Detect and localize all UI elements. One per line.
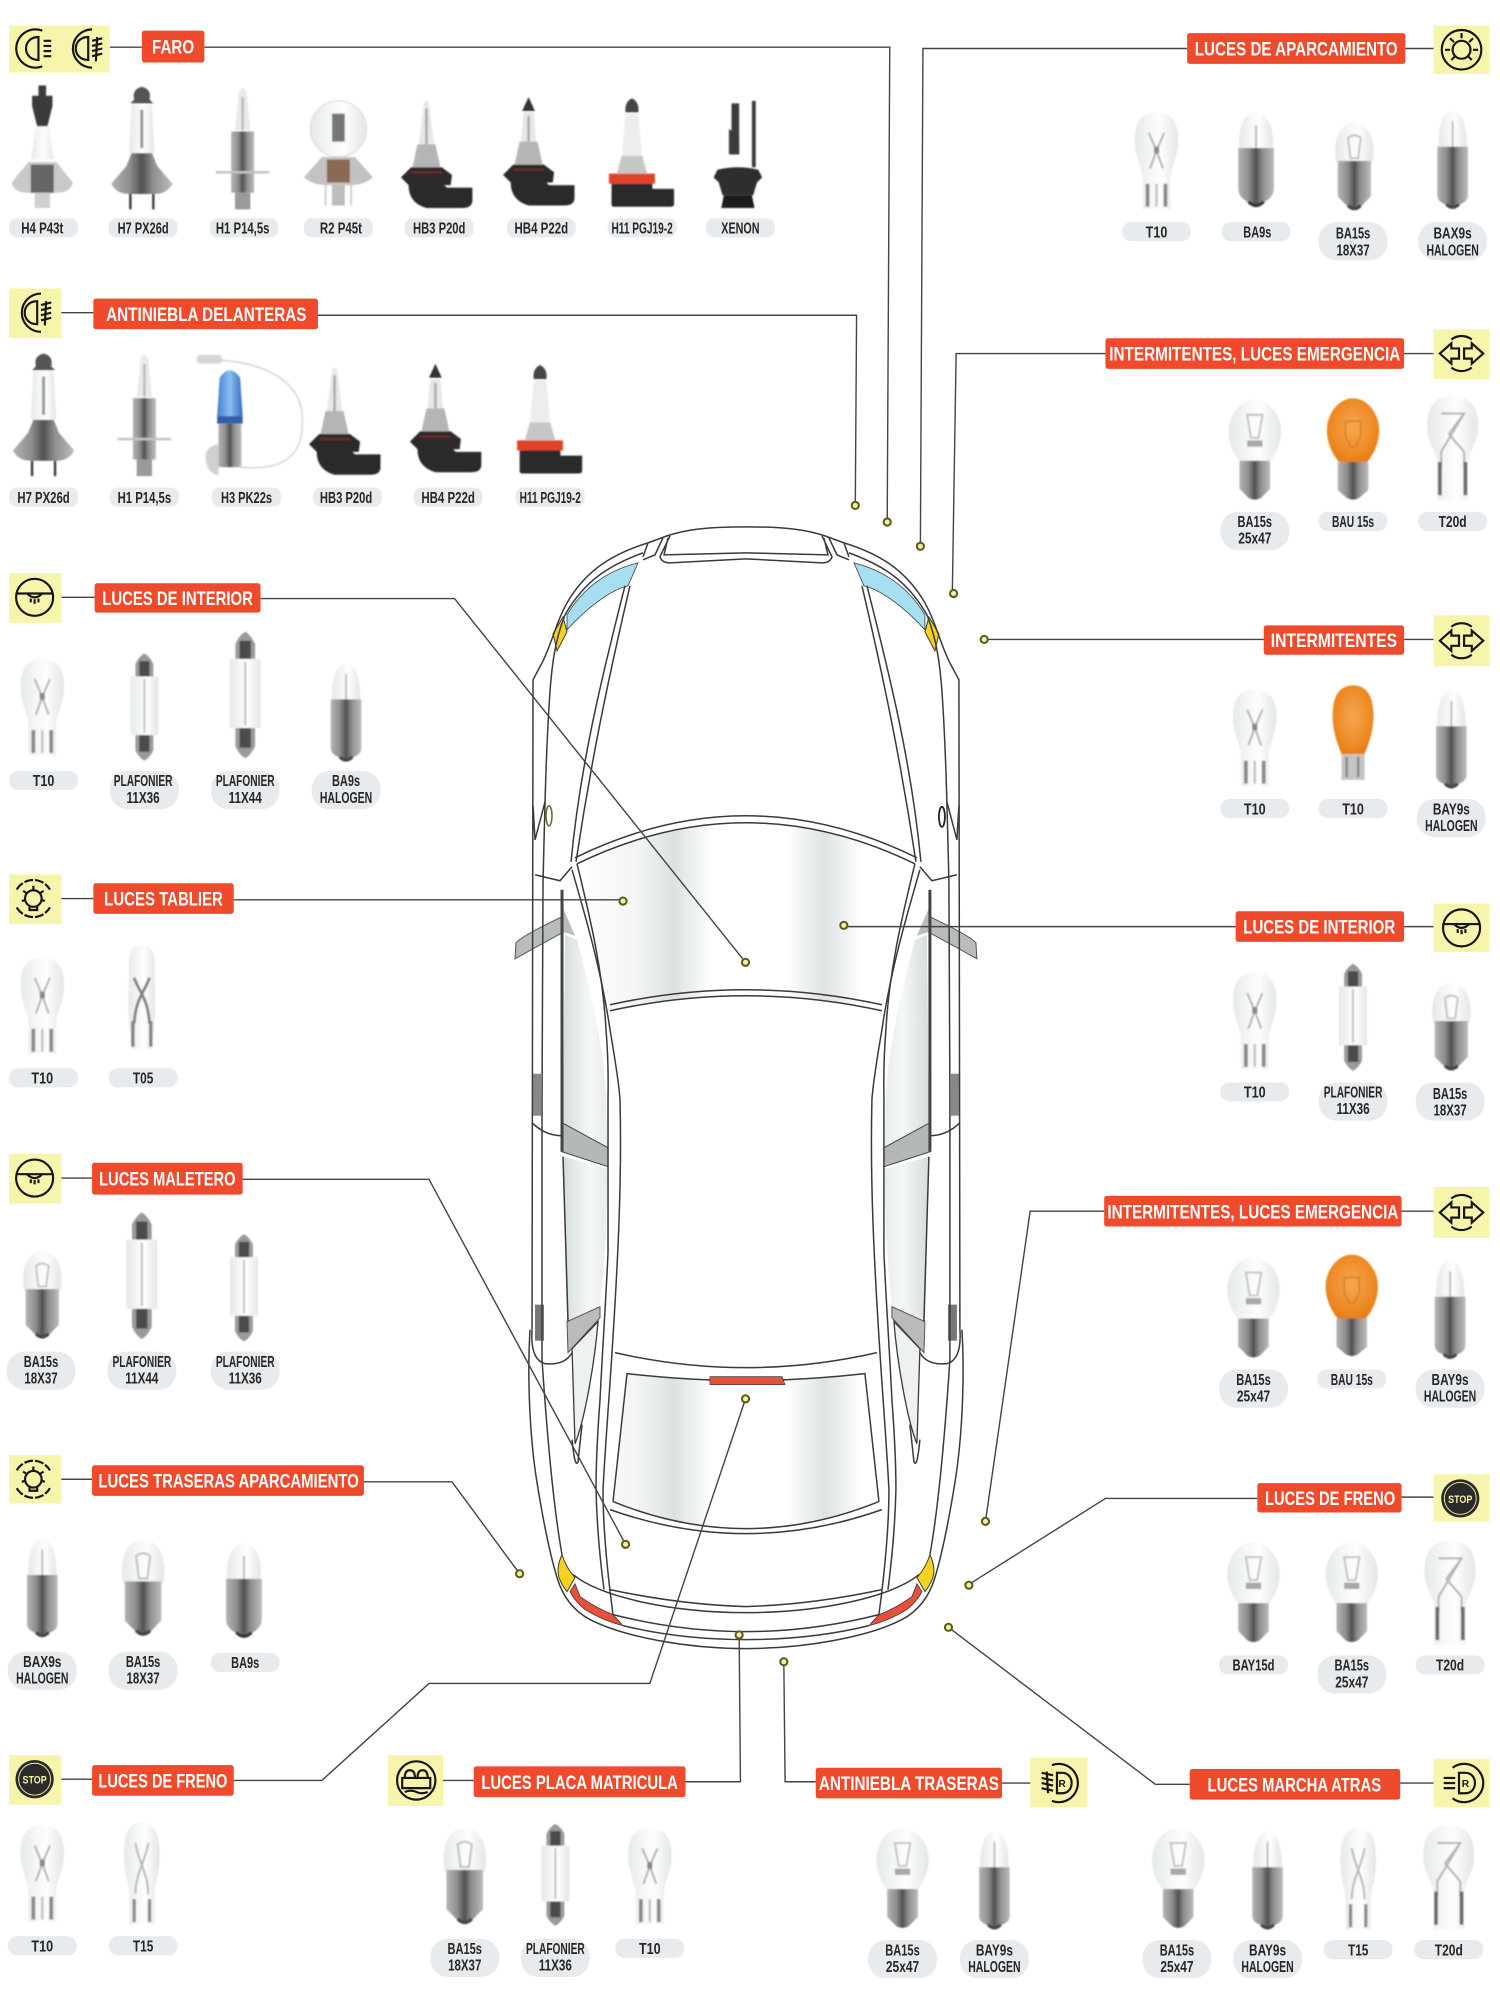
bulb: H11 PGJ19-2: H11 PGJ19-2 bbox=[520, 490, 581, 507]
bulb: BA15s 25x47 bbox=[1219, 1257, 1288, 1408]
bulb: HB4 P22d: HB4 P22d bbox=[515, 221, 568, 238]
bulb: HB3 P20d bbox=[309, 368, 382, 507]
icon: turn signal arrows bbox=[1404, 615, 1490, 666]
bulb: R2 P45t: R2 P45t bbox=[320, 221, 362, 238]
heading: luces maletero: LUCES MALETERO bbox=[99, 1169, 236, 1191]
bulb: T20d: T20d bbox=[1436, 1658, 1464, 1675]
heading: luces tablier: LUCES TABLIER bbox=[104, 889, 223, 911]
panel: intermitentes bbox=[1220, 615, 1490, 837]
icon: parking light bbox=[9, 1455, 92, 1504]
bulb: H1 P14,5s: H1 P14,5s bbox=[118, 490, 171, 507]
bulb: BAX9s halogen: BAX9s bbox=[1433, 226, 1472, 243]
heading: luces traseras aparcamiento: LUCES TRASERAS APARCAMIENTO bbox=[98, 1471, 359, 1493]
bulb: Xenon bbox=[706, 101, 775, 238]
heading: intermitentes luces emergencia: INTERMITENTES, LUCES EMERGENCIA bbox=[1107, 1201, 1398, 1223]
bulb: BA15s 18X37: BA15s bbox=[448, 1941, 482, 1958]
panel: luces traseras aparcamiento bbox=[8, 1455, 364, 1690]
bulb: BA15s 18X37 bbox=[109, 1539, 178, 1690]
bulb: BA9s halogen: HALOGEN bbox=[320, 790, 372, 807]
bulb: BA15s 18X37: BA15s bbox=[1433, 1086, 1467, 1103]
bulb: BA15s 25x47: BA15s bbox=[1160, 1942, 1194, 1959]
bulb: Plafonier 11X36: 11X36 bbox=[127, 790, 160, 807]
panel: luces de interior left bbox=[9, 573, 381, 809]
heading: faro: FARO bbox=[152, 37, 194, 59]
bulb: H1 P14,5s bbox=[110, 355, 179, 507]
panel: luces maletero bbox=[7, 1154, 280, 1390]
heading: antiniebla traseras bbox=[816, 1768, 1002, 1798]
heading: luces de interior bbox=[1236, 911, 1404, 942]
icon: turn signal arrows bbox=[1404, 329, 1490, 379]
bulb: H7 PX26d: H7 PX26d bbox=[17, 490, 70, 507]
bulb: BAX9s halogen: HALOGEN bbox=[16, 1670, 68, 1687]
panel: luces placa matricula bbox=[388, 1755, 686, 1977]
panel: luces de freno left bbox=[8, 1755, 234, 1955]
bulb: H4 P43t bbox=[9, 86, 78, 238]
rear window glass bbox=[613, 1374, 879, 1529]
bulb: HB4 P22d bbox=[410, 364, 483, 507]
bulb: BAU 15s orange bbox=[1317, 1255, 1386, 1389]
bulb: Plafonier 11X36: 11X36 bbox=[539, 1958, 572, 1975]
icon: stop: STOP bbox=[1448, 1494, 1473, 1506]
heading: luces marcha atras: LUCES MARCHA ATRAS bbox=[1208, 1774, 1381, 1796]
bulb: Plafonier 11X44: 11X44 bbox=[229, 790, 262, 807]
bulb: H3 PK22s: H3 PK22s bbox=[221, 490, 272, 507]
bulb: Plafonier 11X36 bbox=[1319, 964, 1388, 1121]
bulb: BA15s 25x47 bbox=[868, 1828, 937, 1978]
bulb: T20d bbox=[1416, 1541, 1485, 1675]
bulb: BAY15d bbox=[1219, 1542, 1288, 1675]
heading: luces de freno: LUCES DE FRENO bbox=[1265, 1488, 1395, 1510]
bulb: T20d: T20d bbox=[1435, 1942, 1463, 1959]
bulb: T10 orange: T10 bbox=[1342, 801, 1364, 818]
heading: luces tablier bbox=[93, 883, 234, 914]
bulb: Plafonier 11X36 bbox=[211, 1234, 280, 1390]
bulb: BA15s 25x47: BA15s bbox=[1335, 1658, 1369, 1675]
bulb: Plafonier 11X44: PLAFONIER bbox=[216, 773, 275, 790]
bulb: T10 bbox=[9, 957, 78, 1088]
bulb: T05 bbox=[109, 944, 178, 1088]
bulb: BAX9s halogen bbox=[8, 1539, 77, 1690]
bulb: T05: T05 bbox=[133, 1071, 153, 1088]
bulb: BAX9s halogen bbox=[1418, 111, 1487, 260]
bulb: BA15s 25x47: BA15s bbox=[885, 1942, 920, 1959]
bulb: T20d: T20d bbox=[1439, 514, 1467, 531]
bulb: T15 bbox=[109, 1823, 178, 1955]
bulb: BA15s 18X37 bbox=[7, 1251, 75, 1390]
bulb: T10: T10 bbox=[33, 773, 55, 790]
bulb: BAY15d: BAY15d bbox=[1232, 1658, 1275, 1675]
bulb: H1 P14,5s bbox=[209, 88, 278, 238]
bulb: T10: T10 bbox=[639, 1941, 661, 1958]
bulb: H11 PGJ19-2: H11 PGJ19-2 bbox=[612, 221, 673, 238]
bulb: T15: T15 bbox=[1348, 1942, 1368, 1959]
bulb: T10 bbox=[1122, 112, 1191, 241]
bulb: BA15s 18X37: 18X37 bbox=[1433, 1103, 1467, 1120]
panel: luces de interior right bbox=[1220, 904, 1490, 1121]
panel: luces tablier bbox=[9, 874, 234, 1088]
bulb: BA9s halogen: BA9s bbox=[332, 773, 360, 790]
bulb: BA15s 25x47: BA15s bbox=[1238, 514, 1272, 531]
bulb: BAY9s halogen bbox=[1417, 690, 1486, 837]
bulb: BA15s 18X37: 18X37 bbox=[1336, 242, 1370, 259]
heading: antiniebla delanteras bbox=[93, 299, 318, 329]
heading: luces de aparcamiento: LUCES DE APARCAMIENTO bbox=[1195, 39, 1398, 61]
bulb: BA15s 18X37: BA15s bbox=[24, 1354, 58, 1371]
bulb: H3 PK22s bbox=[197, 355, 302, 507]
bulb: BA15s 25x47 bbox=[1317, 1542, 1386, 1694]
bulb: H4 P43t: H4 P43t bbox=[21, 221, 64, 238]
heading: luces de freno: LUCES DE FRENO bbox=[98, 1770, 227, 1792]
bulb: H1 P14,5s: H1 P14,5s bbox=[216, 221, 270, 238]
panel: faro bbox=[9, 26, 775, 238]
panel: intermitentes luces emergencia upper bbox=[1105, 329, 1490, 550]
icon: stop: STOP bbox=[22, 1775, 47, 1787]
panel: intermitentes luces emergencia lower bbox=[1104, 1187, 1490, 1408]
heading: intermitentes luces emergencia: INTERMITENTES, LUCES EMERGENCIA bbox=[1109, 344, 1400, 366]
icon: headlamp symbols bbox=[9, 26, 142, 73]
bulb: HB3 P20d: HB3 P20d bbox=[320, 490, 372, 507]
heading: luces placa matricula bbox=[474, 1766, 686, 1797]
icon: interior light bbox=[9, 573, 95, 623]
icon: parking light bbox=[1405, 26, 1490, 74]
heading: luces traseras aparcamiento bbox=[92, 1465, 364, 1496]
bulb: H7 PX26d bbox=[109, 87, 178, 238]
bulb: T10: T10 bbox=[31, 1938, 53, 1955]
bulb: Plafonier 11X36: PLAFONIER bbox=[1324, 1085, 1383, 1102]
bulb: Plafonier 11X36 bbox=[521, 1824, 590, 1977]
panel: luces de aparcamiento bbox=[1122, 26, 1490, 260]
bulb: BA15s 25x47: 25x47 bbox=[886, 1959, 919, 1976]
bulb: T10: T10 bbox=[31, 1071, 53, 1088]
bulb: T10 bbox=[8, 1825, 77, 1955]
bulb: BA15s 18X37 bbox=[430, 1828, 499, 1977]
bulb: BAY9s halogen bbox=[1233, 1832, 1302, 1978]
bulb: BA9s: BA9s bbox=[231, 1655, 259, 1672]
bulb: BA15s 18X37: BA15s bbox=[126, 1654, 160, 1671]
bulb: BAY9s halogen bbox=[960, 1832, 1029, 1978]
heading: luces maletero bbox=[92, 1163, 243, 1195]
bulb: BA15s 25x47: 25x47 bbox=[1238, 531, 1271, 548]
leader lines and dots bbox=[204, 47, 1264, 1784]
bulb: BA15s 18X37 bbox=[1416, 983, 1485, 1121]
icon: interior light bbox=[1404, 904, 1490, 952]
bulb: H11 PGJ19-2 bbox=[608, 98, 677, 238]
bulb: BAX9s halogen: BAX9s bbox=[23, 1654, 62, 1671]
bulb: BA9s bbox=[211, 1543, 280, 1672]
heading: luces de aparcamiento bbox=[1187, 33, 1405, 64]
bulb: HB4 P22d: HB4 P22d bbox=[421, 490, 475, 507]
bulb: T10 bbox=[9, 659, 78, 790]
bulb: H7 PX26d bbox=[9, 354, 78, 507]
bulb: HB3 P20d bbox=[401, 101, 474, 238]
icon: trunk light bbox=[9, 1154, 92, 1204]
heading: faro bbox=[142, 31, 204, 63]
heading: luces placa matricula: LUCES PLACA MATRICULA bbox=[481, 1772, 678, 1794]
bulb: T10: T10 bbox=[1244, 801, 1266, 818]
heading: luces de freno bbox=[92, 1765, 234, 1796]
icon: turn signal arrows bbox=[1402, 1187, 1490, 1238]
icon: reverse light bbox=[1400, 1759, 1490, 1807]
side repeaters bbox=[546, 806, 945, 827]
car illustration bbox=[515, 527, 977, 1649]
bulb: HB4 P22d bbox=[503, 97, 576, 238]
bulb: T15: T15 bbox=[133, 1938, 153, 1955]
bulb: BAY9s halogen: BAY9s bbox=[1433, 801, 1470, 818]
heading: intermitentes luces emergencia bbox=[1104, 1196, 1402, 1227]
car body arcs bbox=[575, 816, 917, 1534]
bulb: Xenon: XENON bbox=[721, 221, 760, 238]
bulb: BA15s 18X37: 18X37 bbox=[24, 1371, 58, 1388]
heading: luces de interior bbox=[95, 583, 261, 613]
bulb: Plafonier 11X44 bbox=[107, 1213, 176, 1390]
bulb: BA15s 25x47: 25x47 bbox=[1335, 1674, 1368, 1691]
bulb: Plafonier 11X36: PLAFONIER bbox=[216, 1354, 275, 1371]
heading: intermitentes bbox=[1264, 625, 1404, 655]
bulb: BA15s 18X37: 18X37 bbox=[448, 1958, 481, 1975]
bulb: BA9s bbox=[1222, 112, 1291, 241]
bulb: BAU 15s orange bbox=[1319, 398, 1388, 531]
bulb: BA9s halogen bbox=[312, 664, 381, 809]
icon: fog lamp bbox=[9, 288, 93, 338]
bulb: R2 P45t bbox=[304, 101, 373, 238]
bulb: BAY9s halogen: BAY9s bbox=[976, 1942, 1013, 1959]
bulb: Plafonier 11X36: 11X36 bbox=[1336, 1101, 1370, 1118]
icon: stop bbox=[1402, 1474, 1490, 1521]
bulb: T20d bbox=[1414, 1825, 1483, 1959]
heading: luces de interior: LUCES DE INTERIOR bbox=[1243, 917, 1395, 939]
icon: dashboard light bbox=[9, 874, 93, 924]
bulb: BAY9s halogen: HALOGEN bbox=[1241, 1959, 1294, 1976]
bulb: Plafonier 11X44: PLAFONIER bbox=[112, 1354, 171, 1371]
bulb: BA15s 25x47 bbox=[1142, 1828, 1211, 1978]
bulb: T10 bbox=[1220, 689, 1289, 818]
bulb: Plafonier 11X36: PLAFONIER bbox=[114, 773, 173, 790]
bulb: Plafonier 11X44 bbox=[211, 632, 280, 809]
heading: antiniebla traseras: ANTINIEBLA TRASERAS bbox=[819, 1773, 999, 1795]
bulb: BA15s 18X37 bbox=[1319, 123, 1388, 260]
bulb: T10 orange bbox=[1319, 685, 1388, 818]
bulb: T10: T10 bbox=[1146, 224, 1167, 241]
icon: rear fog lamp bbox=[1002, 1757, 1088, 1807]
bulb: T20d bbox=[1418, 396, 1487, 531]
bulb: BAY9s halogen bbox=[1416, 1261, 1485, 1408]
bulb: BAY9s halogen: BAY9s bbox=[1432, 1372, 1469, 1389]
bulb: BA15s 18X37: BA15s bbox=[1336, 226, 1370, 243]
bulb: BA15s 18X37: 18X37 bbox=[127, 1670, 160, 1687]
bulb: Plafonier 11X44: 11X44 bbox=[125, 1371, 159, 1388]
bulb: T10: T10 bbox=[1244, 1085, 1266, 1102]
icon: stop bbox=[9, 1755, 92, 1805]
icon: plate light bbox=[388, 1755, 474, 1806]
heading: antiniebla delanteras: ANTINIEBLA DELANTERAS bbox=[106, 304, 306, 326]
car left half bbox=[515, 527, 746, 1649]
panel: antiniebla delanteras bbox=[9, 288, 585, 507]
bulb: BA15s 25x47: 25x47 bbox=[1237, 1388, 1270, 1405]
bulb: BAY9s halogen: HALOGEN bbox=[968, 1959, 1021, 1976]
bulb: BA15s 25x47: 25x47 bbox=[1160, 1959, 1194, 1976]
bulb: T15 bbox=[1324, 1828, 1393, 1959]
bulb: Plafonier 11X36 bbox=[110, 653, 179, 809]
bulb: HB3 P20d: HB3 P20d bbox=[413, 221, 465, 238]
bulb: BA15s 25x47: BA15s bbox=[1236, 1372, 1271, 1389]
panel: luces marcha atras bbox=[1142, 1759, 1490, 1978]
bulb: Plafonier 11X36: PLAFONIER bbox=[526, 1941, 585, 1958]
heading: intermitentes: INTERMITENTES bbox=[1271, 630, 1397, 652]
bulb: H7 PX26d: H7 PX26d bbox=[118, 221, 169, 238]
bulb: BA15s 25x47 bbox=[1220, 399, 1289, 550]
heading: luces de interior: LUCES DE INTERIOR bbox=[102, 588, 253, 610]
bulb: BAY9s halogen: BAY9s bbox=[1249, 1942, 1286, 1959]
heading: luces de freno bbox=[1257, 1483, 1402, 1512]
bulb: T10 bbox=[1220, 973, 1289, 1102]
heading: intermitentes luces emergencia bbox=[1105, 338, 1404, 369]
bulb: BAU 15s orange: BAU 15s bbox=[1332, 514, 1374, 531]
high-mounted brake light bbox=[710, 1377, 785, 1385]
car right half bbox=[746, 527, 977, 1649]
bulb: Plafonier 11X36: 11X36 bbox=[229, 1371, 262, 1388]
bulb: T10 bbox=[615, 1828, 684, 1958]
panel: antiniebla traseras bbox=[816, 1757, 1088, 1978]
bulb: BAU 15s orange: BAU 15s bbox=[1331, 1372, 1373, 1389]
heading: luces marcha atras bbox=[1190, 1769, 1400, 1800]
bulb: H11 PGJ19-2 bbox=[516, 365, 585, 507]
panel: luces de freno right bbox=[1219, 1474, 1490, 1694]
windshield glass bbox=[577, 823, 915, 1011]
bulb: BA9s: BA9s bbox=[1243, 224, 1271, 241]
